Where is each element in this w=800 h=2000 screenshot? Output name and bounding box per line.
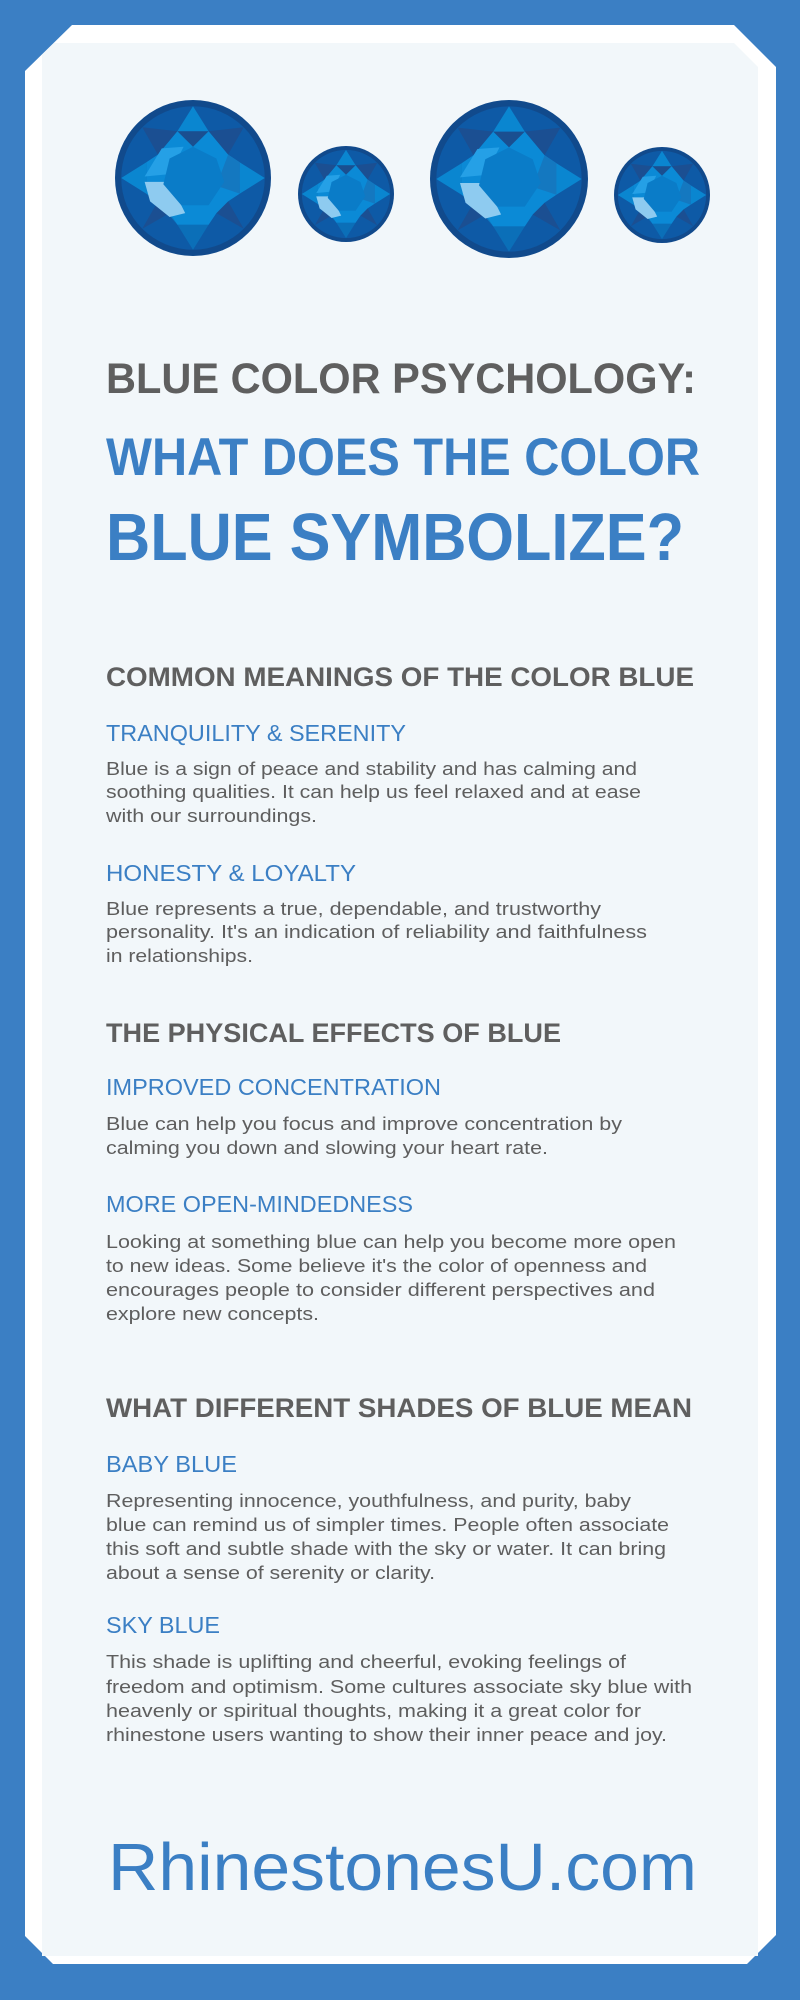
gem 4 bbox=[614, 147, 710, 243]
text: baby blue: Representing innocence, youthfulness, and purity, baby bbox=[106, 1491, 631, 1511]
section heading: WHAT DIFFERENT SHADES OF BLUE MEAN bbox=[106, 1393, 692, 1423]
subheading: concentration: IMPROVED CONCENTRATION bbox=[106, 1074, 441, 1100]
gem 3 bbox=[430, 100, 588, 258]
section heading: COMMON MEANINGS OF THE COLOR BLUE bbox=[106, 662, 694, 692]
subheading: honesty: HONESTY & LOYALTY bbox=[106, 860, 356, 886]
text: sky blue: heavenly or spiritual thoughts, making it a great color for bbox=[106, 1701, 641, 1721]
title: BLUE COLOR PSYCHOLOGY: bbox=[106, 355, 696, 403]
text: tranquility: soothing qualities. It can help us feel relaxed and at ease bbox=[106, 782, 641, 802]
text: sky blue bbox=[106, 1652, 692, 1745]
text: tranquility: Blue is a sign of peace and stability and has calming and bbox=[106, 759, 637, 779]
section: shades of blue bbox=[106, 1393, 692, 1745]
footer logo text: RhinestonesU.com bbox=[108, 1830, 697, 1905]
text: concentration: Blue can help you focus and improve concentration by bbox=[106, 1114, 622, 1134]
text: sky blue: rhinestone users wanting to show their inner peace and joy. bbox=[106, 1725, 667, 1745]
subheading: open-mindedness: MORE OPEN-MINDEDNESS bbox=[106, 1191, 413, 1217]
section heading: THE PHYSICAL EFFECTS OF BLUE bbox=[106, 1018, 561, 1048]
section: common meanings bbox=[105, 662, 694, 966]
gem 2 bbox=[298, 146, 394, 242]
subheading: tranquility: TRANQUILITY & SERENITY bbox=[106, 720, 406, 746]
text: honesty: personality. It's an indication of reliability and faithfulness bbox=[106, 922, 647, 942]
text: baby blue: this soft and subtle shade with the sky or water. It can bring bbox=[106, 1539, 666, 1559]
title bbox=[106, 355, 700, 575]
text: open-mindedness: encourages people to consider different perspectives and bbox=[106, 1280, 655, 1300]
text: sky blue: freedom and optimism. Some cultures associate sky blue with bbox=[106, 1677, 692, 1697]
text: tranquility: with our surroundings. bbox=[105, 806, 317, 826]
text: open-mindedness: explore new concepts. bbox=[106, 1304, 319, 1324]
text: baby blue: blue can remind us of simpler times. People often associate bbox=[106, 1515, 669, 1535]
text: baby blue bbox=[106, 1491, 669, 1583]
text: tranquility bbox=[105, 759, 641, 826]
gem 1 bbox=[115, 100, 271, 256]
text: open-mindedness: to new ideas. Some believe it's the color of openness and bbox=[106, 1256, 647, 1276]
title: WHAT DOES THE COLOR bbox=[106, 428, 700, 487]
text: open-mindedness: Looking at something blue can help you become more open bbox=[106, 1232, 676, 1252]
text: honesty: Blue represents a true, dependable, and trustworthy bbox=[106, 899, 601, 919]
text: open-mindedness bbox=[106, 1232, 676, 1324]
text: concentration: calming you down and slowing your heart rate. bbox=[106, 1138, 548, 1158]
title: BLUE SYMBOLIZE? bbox=[106, 500, 684, 575]
text: baby blue: about a sense of serenity or clarity. bbox=[106, 1563, 435, 1583]
text: honesty bbox=[106, 899, 647, 966]
subheading: sky blue: SKY BLUE bbox=[106, 1612, 220, 1638]
text: honesty: in relationships. bbox=[106, 946, 253, 966]
section: physical effects bbox=[106, 1018, 676, 1324]
text: sky blue: This shade is uplifting and cheerful, evoking feelings of bbox=[106, 1652, 627, 1672]
text: concentration bbox=[106, 1114, 622, 1158]
subheading: baby blue: BABY BLUE bbox=[106, 1451, 237, 1477]
